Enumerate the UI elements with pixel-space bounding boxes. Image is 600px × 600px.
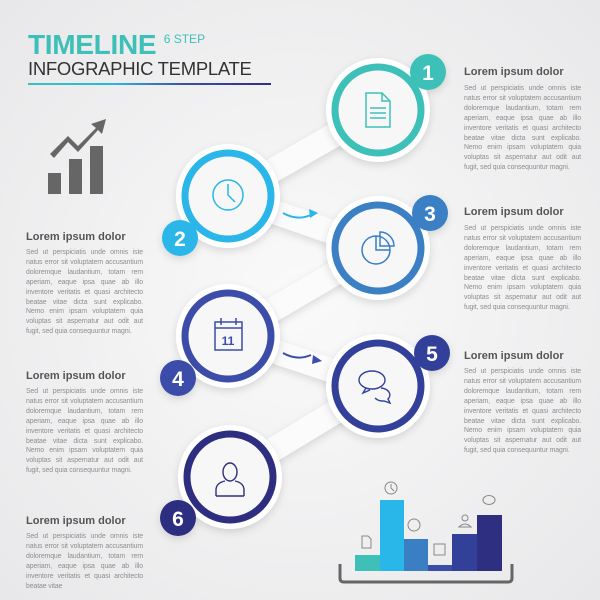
step 1 (326, 54, 446, 162)
graphic layer: 4 (172, 368, 184, 391)
title: TIMELINE 6 STEP (28, 29, 205, 60)
text 3: Lorem ipsum dolor (464, 206, 564, 218)
text: Sed ut perspiciatis unde omnis iste natus error sit voluptatem accusantium doloremque laudantium, totam rem aperiam, eaque ipsa quae ab illo inventore veritatis et quasi architecto beatae vitae (26, 533, 143, 590)
step 6 (160, 425, 282, 536)
text: Sed ut perspiciatis unde omnis iste natus error sit voluptatem accusantium doloremque laudantium, totam rem aperiam, eaque ipsa quae ab illo inventore veritatis et quasi architecto beatae vitae dicta sunt explicabo. Nemo enim ipsam voluptatem quia voluptas sit aspernatur aut odit aut fugit, sed quia consequuntur magni. (26, 388, 143, 474)
text: Sed ut perspiciatis unde omnis iste natus error sit voluptatem accusantium doloremque laudantium, totam rem aperiam, eaque ipsa quae ab illo inventore veritatis et quasi architecto beatae vitae dicta sunt explicabo. Nemo enim ipsam voluptatem quia voluptas sit aspernatur aut odit aut fugit, sed quia consequuntur magni. (464, 225, 581, 311)
title underline (28, 83, 271, 85)
connectors (228, 110, 378, 477)
text 1: Lorem ipsum dolor (464, 66, 564, 78)
text 6: Lorem ipsum dolor (26, 515, 126, 527)
text: Sed ut perspiciatis unde omnis iste natus error sit voluptatem accusantium doloremque laudantium, totam rem aperiam, eaque ipsa quae ab illo inventore veritatis et quasi architecto beatae vitae dicta sunt explicabo. Nemo enim ipsam voluptatem quia voluptas sit aspernatur aut odit aut fugit, sed quia consequuntur magni. (464, 85, 581, 171)
step 2 (162, 144, 280, 256)
graphic layer: 2 (174, 228, 186, 251)
step 5 (326, 334, 450, 438)
icon: growth chart (48, 119, 106, 194)
step 4 (160, 284, 280, 396)
graphic layer: 3 (424, 203, 436, 226)
text 5: Lorem ipsum dolor (464, 350, 564, 362)
bar chart (340, 482, 512, 582)
step 3 (326, 195, 448, 300)
text: Sed ut perspiciatis unde omnis iste natus error sit voluptatem accusantium doloremque laudantium, totam rem aperiam, eaque ipsa quae ab illo inventore veritatis et quasi architecto beatae vitae dicta sunt explicabo. Nemo enim ipsam voluptatem quia voluptas sit aspernatur aut odit aut fugit, sed quia consequuntur magni. (26, 249, 143, 335)
text 2: Lorem ipsum dolor (26, 231, 126, 243)
title: INFOGRAPHIC TEMPLATE (28, 58, 252, 79)
graphic layer: 1 (422, 62, 434, 85)
title (28, 29, 252, 79)
graphic layer: 11 (222, 334, 235, 348)
text 4: Lorem ipsum dolor (26, 370, 126, 382)
arrows (283, 213, 311, 358)
graphic layer: 6 (172, 508, 184, 531)
text: Sed ut perspiciatis unde omnis iste natus error sit voluptatem accusantium doloremque laudantium, totam rem aperiam, eaque ipsa quae ab illo inventore veritatis et quasi architecto beatae vitae dicta sunt explicabo. Nemo enim ipsam voluptatem quia voluptas sit aspernatur aut odit aut fugit, sed quia consequuntur magni. (464, 368, 581, 454)
graphic layer: 5 (426, 343, 438, 366)
